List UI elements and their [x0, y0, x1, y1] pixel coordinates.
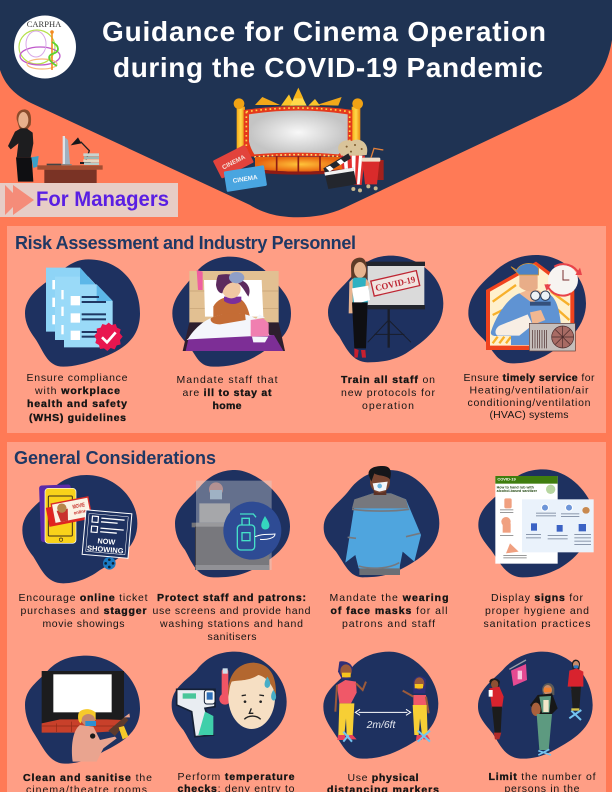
text: train all staff: Train all staff on [341, 374, 435, 386]
icon: cleaning cinema room [25, 656, 140, 764]
icon: online tickets: SHOWING [87, 543, 124, 556]
text: timely HVAC service: Ensure timely service for [464, 372, 595, 384]
text: physical distancing markers: Use physical [348, 772, 419, 784]
text: protect staff and patrons: washing stations and hand [159, 618, 303, 630]
text: timely HVAC service [464, 372, 595, 421]
logo: CARPHA [14, 16, 76, 78]
section band: For Managers [0, 183, 178, 217]
text: display signs: sanitation practices [484, 618, 590, 630]
text: display signs [484, 592, 590, 630]
text: ill staff stay home: home [212, 400, 242, 412]
text: limit number of persons [488, 771, 596, 792]
icon: staff training presentation [328, 256, 443, 362]
text: ill staff stay home [176, 374, 278, 412]
icon: hygiene signs posters: COVID-19 [497, 477, 516, 482]
text: protect staff and patrons [152, 592, 311, 643]
text: workplace health and safety: Ensure compliance [26, 372, 128, 384]
text: clean and sanitise [23, 772, 152, 792]
text: timely HVAC service: Heating/ventilation/air [470, 384, 589, 396]
text: clean and sanitise: Clean and sanitise the [23, 772, 152, 784]
icon: limit number of persons [478, 652, 593, 759]
text: online tickets [18, 592, 148, 630]
icon: person wearing face mask [324, 466, 439, 577]
text: workplace health and safety: with workplace [34, 385, 120, 397]
icon: hygiene signs posters [478, 469, 594, 577]
text: wearing of face masks: Mandate the wearing [330, 592, 448, 604]
text: wearing of face masks: patrons and staff [342, 618, 435, 630]
text: temperature checks [178, 771, 295, 792]
text: display signs: proper hygiene and [485, 605, 589, 617]
icon: HVAC technician [468, 255, 586, 363]
text: timely HVAC service: conditioning/ventilation [468, 397, 591, 409]
text: physical distancing markers [327, 772, 439, 792]
icon: online tickets: NOW [97, 536, 116, 547]
text: timely HVAC service: (HVAC) systems [490, 409, 568, 421]
title: Guidance for Cinema Operation [102, 16, 546, 47]
text: train all staff: new protocols for [341, 387, 436, 399]
title [102, 16, 546, 83]
icon: online tickets [22, 475, 137, 583]
illustration: cinema marquee with tickets and popcorn: CINEMA [232, 174, 258, 185]
illustration: manager at desk [8, 109, 103, 183]
text: online tickets: Encourage online ticket [18, 592, 148, 604]
icon: temperature checks [172, 652, 287, 759]
text: train all staff [341, 374, 436, 412]
text: train all staff: operation [362, 400, 414, 412]
text: workplace health and safety: health and safety [27, 398, 127, 410]
icon: online tickets: online [73, 508, 87, 516]
text: temperature checks: Perform temperature [178, 771, 295, 783]
text: online tickets: movie showings [42, 618, 124, 630]
section band: For Managers: For Managers [36, 188, 169, 211]
text: wearing of face masks [330, 592, 448, 630]
icon: staff training presentation: COVID-19 [374, 274, 417, 293]
heading: risk assessment: Risk Assessment and Industry Personnel [15, 233, 356, 253]
text: ill staff stay home: Mandate staff that [176, 374, 278, 386]
icon: ill staff in bed [172, 257, 291, 367]
heading: general considerations: General Considerations [14, 448, 216, 468]
text: protect staff and patrons: use screens and provide hand [152, 605, 311, 617]
illustration: cinema marquee with tickets and popcorn: CINEMA [221, 154, 247, 171]
icon: protective screens and hand sanitiser [175, 470, 290, 577]
title: during the COVID-19 Pandemic [113, 52, 543, 83]
text: wearing of face masks: of face masks for all [330, 605, 448, 617]
illustration: cinema marquee with tickets and popcorn [213, 88, 384, 192]
icon: online tickets: MOVIE [72, 502, 86, 511]
panel: Risk Assessment and Industry Personnel [7, 226, 606, 433]
icon: hygiene signs posters: alcohol-based sanitizer [497, 489, 538, 493]
text: limit number of persons: Limit the number of [488, 771, 596, 783]
header background shape [0, 0, 612, 217]
logo: CARPHA: CARPHA [27, 19, 62, 29]
icon: physical distancing [323, 652, 438, 759]
text: protect staff and patrons: Protect staff and patrons: [157, 592, 306, 604]
text: protect staff and patrons: sanitisers [208, 631, 256, 643]
icon: compliance documents [25, 259, 140, 367]
text: ill staff stay home: are ill to stay at [182, 387, 272, 399]
text: display signs: Display signs for [491, 592, 584, 604]
text: online tickets: purchases and stagger [20, 605, 146, 617]
text: workplace health and safety [26, 372, 128, 424]
icon: physical distancing: 2m/6ft [366, 720, 396, 731]
icon: hygiene signs posters: How to hand rub with [497, 485, 534, 489]
text: workplace health and safety: (WHS) guidelines [29, 412, 126, 424]
